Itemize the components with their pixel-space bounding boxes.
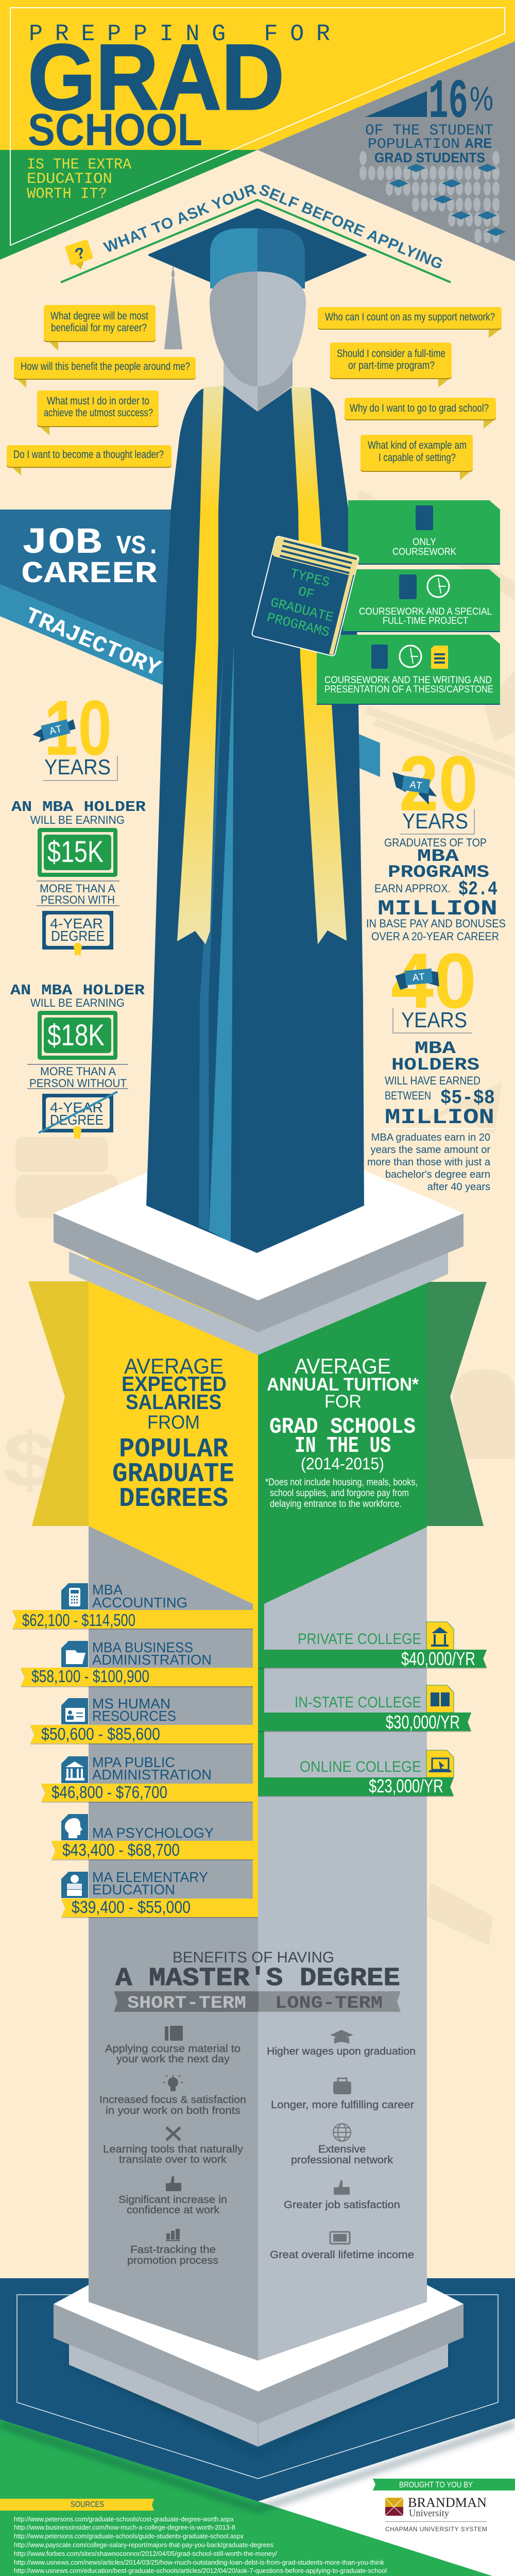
heading: benefits of having a master's degree: A MASTER'S DEGREE [115,1964,400,1993]
heading: annual tuition: (2014-2015) [301,1454,384,1473]
sources list: http://www.businessinsider.com/how-much-a-college-degree-is-worth-2013-8 [14,2523,235,2531]
gown fold: light blue [209,645,234,1242]
question bubble: benefit: How will this benefit the people around me? [21,361,190,372]
text: significant increase [118,2194,227,2216]
icon: dollar bill 18k [38,1011,117,1060]
question bubble: degree [44,305,156,351]
column: at 40 years: WILL HAVE EARNED [385,1074,480,1087]
column: at 10 years [10,684,146,1140]
sources list: http://www.forbes.com/sites/shawnoconnor/2012/04/05/grad-school-still-worth-the-money/ [14,2550,277,2557]
sources list: http://www.usnews.com/news/articles/2014/03/25/how-much-outstanding-loan-debt-is-from-grad-students-more-than-you-think [14,2558,384,2566]
logo: brandman university: University [409,2508,449,2519]
column: at 20 years: MILLION [377,896,497,921]
benefits: short-term column [99,2026,246,2266]
ribbon: short-term and long-term [114,1991,401,2013]
salary row: mba business administration: $58,100 - $100,900 [31,1667,149,1686]
salary row: mpa public administration: MPA PUBLIC [92,1754,175,1770]
pedestal: lower [54,2304,464,2455]
salary row: ma psychology [52,1814,253,1859]
corner rule [43,756,117,781]
text: mba graduates note: bachelor's degree earn [385,1169,490,1180]
ribbon: trajectory: TRAJECTORY [21,603,164,683]
heading: what to ask yourself: WHAT TO ASK YOURSELF BEFORE APPLYING [103,184,442,268]
question bubble: thought leader: Do I want to become a thought leader? [13,449,164,461]
label: years: YEARS [402,809,468,833]
icon: dollar bill 15k: $15K [47,835,104,869]
text: mba graduates note: MBA graduates earn in 20 [371,1132,490,1143]
statistic: 16 percent of students: 16 [428,71,468,134]
text: more than: MORE THAN A [40,882,115,895]
ribbon: brought to you by [373,2479,515,2490]
ribbon: trajectory [0,584,380,777]
panel: coursework and thesis: PRESENTATION OF A THESIS/CAPSTONE [324,684,493,695]
question bubble: support network [318,307,502,338]
question bubble: example [360,435,473,480]
heading: expected salaries: POPULAR [119,1434,228,1465]
icon grid: student population [359,151,506,243]
head [210,272,306,386]
tuition row: online college [258,1750,454,1797]
column: at 10 years: PERSON WITHOUT [29,1077,127,1090]
question bubble: full-time: or part-time program? [348,360,435,371]
salary row: mba business administration: ADMINISTRATION [92,1652,212,1668]
statistic: 16 percent of students: ARE [465,135,492,151]
rule [37,905,119,906]
text: higher wages: Higher wages upon graduation [267,2046,416,2057]
column: at 10 years: WILL BE EARNING [30,996,125,1009]
tuition row: in-state college [258,1685,471,1733]
salary row: mba business administration: MBA BUSINESS [92,1639,193,1655]
column: at 10 years: WILL BE EARNING [30,814,125,826]
salary row: mpa public administration: ADMINISTRATION [92,1767,212,1783]
heading: benefits of having a master's degree: BENEFITS OF HAVING [173,1949,334,1966]
faded background illustrations: $ [3,1416,57,1503]
text: greater job satisfaction: Greater job satisfaction [284,2199,400,2211]
text: fast-tracking [127,2244,218,2266]
text: mba graduates note: more than those with just a [367,1157,491,1168]
icon: dollar bill 18k: $18K [47,1019,105,1052]
salary row: mpa public administration: $46,800 - $76,700 [52,1783,167,1802]
tuition row: private college: $40,000/YR [401,1648,475,1669]
text: extensive network: professional network [291,2155,393,2166]
panel: coursework and thesis [317,635,500,705]
question bubble: benefit [14,357,196,388]
text: fast-tracking: promotion process [127,2255,218,2266]
book: types of graduate programs: GRADUATE [269,595,335,625]
neck [224,355,293,412]
text: significant increase: Significant increase in [118,2194,227,2206]
tuition row: private college [258,1622,487,1669]
corner rule [400,809,474,834]
text: graduates of top mba programs: GRADUATES OF TOP [384,836,487,849]
column: at 40 years [367,937,495,1193]
panel: coursework and special project [343,569,500,632]
heading: benefits of having a master's degree [115,1949,400,1993]
column: at 20 years: $2.4 [458,878,497,901]
banner: at [395,968,439,990]
text: learning tools [103,2144,243,2165]
book: types of graduate programs: TYPES [288,566,331,590]
panel: job vs career [0,510,171,653]
column: at 40 years: $5-$8 [440,1087,495,1109]
faded background illustrations [3,489,515,1946]
column: at 20 years: EARN APPROX. [374,882,451,895]
statistic: 16 percent of students: GRAD STUDENTS [374,150,485,165]
text: fast-tracking: Fast-tracking the [130,2244,216,2256]
sources list: http://www.usnews.com/education/best-graduate-schools/articles/2012/04/20/ask-7-questions-before-applying-to-graduate-school [14,2567,387,2574]
logo: brandman university: CHAPMAN UNIVERSITY SYSTEM [385,2526,487,2533]
graduate figure [146,209,366,1253]
question bubble: thought leader [7,445,171,476]
pedestal: upper [54,1124,464,1355]
gown fold: mid blue [199,648,224,1231]
text: mba holder: AN MBA HOLDER [11,799,146,816]
column: at 40 years: BETWEEN [385,1089,431,1102]
statistic: 16 percent of students: % [470,79,493,117]
ribbon: short-term and long-term: SHORT-TERM [127,1994,246,2013]
text: mba graduates note: years the same amount or [371,1144,490,1156]
panel: only coursework [348,500,500,565]
question bubble: success [37,391,159,435]
panel: green subtitle area [0,150,258,260]
salary row: mpa public administration [41,1754,253,1802]
icon: bar chart [166,2229,180,2241]
book: types of graduate programs: PROGRAMS [265,610,331,640]
rule [37,880,119,882]
title: GRAD [28,25,284,129]
sources list [14,2515,387,2574]
book: types of graduate programs [251,536,359,656]
banner: at [389,772,439,806]
panel: coursework and thesis: COURSEWORK AND THE WRITING AND [324,675,492,686]
icon: suitcase [333,2078,351,2094]
green chevron line [61,200,451,282]
label: years: YEARS [44,755,111,779]
title: PREPPING FOR [29,21,330,47]
text: lifetime income: Great overall lifetime income [270,2249,414,2261]
salary row: mba accounting [12,1582,253,1630]
salary row: ma elementary education [61,1869,258,1917]
question bubble: example: I capable of setting? [379,452,456,464]
text: significant increase: confidence at work [127,2205,220,2216]
panel: coursework and special project: COURSEWORK AND A SPECIAL [359,606,492,617]
number: 10: 10 [44,684,112,772]
statistic: 16 percent of students: POPULATION [368,137,460,152]
icon: thumbs up [334,2180,350,2195]
text: applying course material: Applying course material to [105,2043,241,2055]
tuition row: in-state college: IN-STATE COLLEGE [295,1694,421,1711]
icon: tools [166,2127,180,2140]
text: applying course material [105,2043,241,2065]
text: learning tools: Learning tools that naturally [103,2144,243,2155]
icon: light bulb [163,2075,183,2091]
panel: coursework and special project: FULL-TIME PROJECT [383,616,468,626]
heading: annual tuition: ANNUAL TUITION* [267,1375,419,1395]
column: at 40 years: MILLION [385,1105,494,1130]
sources list: http://www.petersons.com/graduate-schools/guide-students-graduate-school.aspx [14,2532,244,2540]
ribbon: short-term and long-term: LONG-TERM [275,1994,383,2013]
icon: 4-year degree [42,911,113,956]
icon: 4-year degree crossed out [39,1092,117,1140]
statistic: 16 percent of students: OF THE STUDENT [365,122,493,140]
icon: 4-year degree crossed out: 4-YEAR [50,1099,103,1115]
panel: tuition section green banner [258,1236,487,1796]
panel: job vs career: CAREER [21,557,158,591]
text: mba holders earned: MBA [415,1039,456,1059]
tuition row: online college: ONLINE COLLEGE [300,1758,421,1775]
heading: annual tuition: FOR [324,1392,362,1412]
icon: dollar bill 15k [38,828,117,877]
salary row: ms human resources: RESOURCES [92,1708,176,1724]
text: extensive network [291,2144,393,2166]
question bubble: why grad school [345,398,496,429]
rule [27,1088,128,1089]
banner: at: AT [409,779,423,793]
panel: job vs career: VS. [116,532,161,562]
salary row: ms human resources [30,1696,253,1743]
column: at 20 years [366,740,506,943]
salary row: ms human resources: $50,600 - $85,600 [41,1724,160,1743]
text: learning tools: translate over to work [119,2154,227,2165]
icon: question bubble [65,239,96,272]
heading: expected salaries: GRADUATE [112,1459,234,1489]
icon: 4-year degree: 4-YEAR [50,916,103,931]
column: at 20 years: OVER A 20-YEAR CAREER [371,930,499,943]
heading: expected salaries: FROM [147,1412,200,1433]
corner rule [393,1008,472,1033]
question bubble: degree: What degree will be most [50,310,148,322]
rule [27,1064,128,1065]
text: mba holder second: AN MBA HOLDER [10,982,145,999]
heading: annual tuition: *Does not include housing, meals, books, [265,1477,418,1488]
subtitle: IS THE EXTRA [27,156,131,174]
text: mba graduates note [367,1132,491,1193]
icon: graduation cap [330,2030,353,2044]
column: white capital [54,2285,464,2392]
salary row: ma psychology: MA PSYCHOLOGY [92,1825,214,1841]
sources list: http://www.petersons.com/graduate-schools/cost-graduate-degree-worth.aspx [14,2515,234,2523]
text: more than without: MORE THAN A [40,1065,116,1078]
column: at 20 years: MBA [417,847,459,867]
icon: 4-year degree crossed out: DEGREE [50,1112,104,1128]
panel: yellow title area [0,0,515,150]
heading: expected salaries: EXPECTED [122,1372,227,1396]
logo: brandman university: BRANDMAN [408,2495,487,2510]
question bubble: example: What kind of example am [368,439,467,451]
benefits: long-term column [267,2030,416,2261]
statistic: 16 percent of students [365,71,493,165]
panel: only coursework: ONLY [413,537,436,548]
panel: salaries section yellow banner [28,1236,258,1917]
banner: at [31,718,77,743]
icon: tassel [164,266,182,349]
text: extensive network: Extensive [318,2144,366,2155]
salary row: ms human resources: MS HUMAN [92,1696,170,1711]
tuition row: online college: $23,000/YR [369,1775,443,1797]
heading: annual tuition: GRAD SCHOOLS [269,1414,416,1440]
heading: annual tuition: IN THE US [295,1433,391,1459]
panel: only coursework: COURSEWORK [392,547,456,557]
salary row: ma psychology: $43,400 - $68,700 [62,1840,180,1859]
tuition row: in-state college: $30,000/YR [386,1711,460,1733]
question bubble: success: What must I do in order to [47,395,149,407]
text: increased focus: in your work on both fronts [106,2105,241,2116]
sources list: http://www.payscale.com/college-salary-report/majors-that-pay-you-back/graduate-degrees [14,2541,273,2549]
icon: globe [333,2124,351,2141]
logo: brandman university [385,2495,487,2533]
salary row: mba business administration [21,1639,253,1686]
salary row: ma elementary education: EDUCATION [92,1882,175,1897]
number: 20: 20 [399,740,478,827]
ribbon: sources: SOURCES [71,2500,104,2509]
subtitle: EDUCATION [27,171,112,188]
title: SCHOOL [28,104,202,155]
label: years: YEARS [401,1008,467,1032]
question bubble: success: achieve the utmost success? [44,407,153,419]
heading: expected salaries: AVERAGE [124,1354,224,1378]
text: longer career: Longer, more fulfilling career [271,2099,414,2111]
decorative white outline [10,8,505,245]
icon: book [165,2026,183,2041]
icon: 4-year degree: DEGREE [51,928,105,944]
salary row: ma elementary education: $39,400 - $55,000 [72,1897,191,1917]
tuition row: private college: PRIVATE COLLEGE [298,1631,421,1648]
text: mba graduates note: after 40 years [427,1181,490,1193]
gown [146,386,364,1253]
heading: expected salaries: SALARIES [126,1390,221,1414]
heading: expected salaries: DEGREES [119,1483,228,1514]
icon: thumbs up [166,2176,181,2191]
column: light side [258,1527,427,2361]
book: types of graduate programs: OF [297,584,316,603]
panel: grey statistic area [258,41,515,261]
icon: mortarboard [149,209,366,301]
ribbon: sources [0,2499,154,2511]
salary row: ma elementary education: MA ELEMENTARY [92,1869,208,1885]
heading: annual tuition: AVERAGE [295,1354,391,1378]
question bubble: full-time [330,343,452,387]
salary row: mba accounting: MBA [92,1582,123,1598]
icon: money [330,2232,350,2244]
text: increased focus [99,2094,246,2116]
text: applying course material: your work the next day [116,2054,230,2065]
heading: annual tuition [265,1354,419,1510]
icon: question bubble: ? [73,244,87,263]
heading: annual tuition: delaying entrance to the workforce. [270,1499,402,1510]
subtitle: WORTH IT? [27,185,107,203]
salary row: mba accounting: $62,100 - $114,500 [22,1611,135,1630]
number: 40: 40 [391,937,476,1025]
column: at 40 years: HOLDERS [391,1056,479,1075]
heading: annual tuition: school supplies, and forgone pay from [270,1488,409,1499]
salary row: mba accounting: ACCOUNTING [92,1595,187,1611]
banner: at: AT [412,972,425,985]
stole left [177,386,224,944]
ribbon: brought to you by: BROUGHT TO YOU BY [399,2481,473,2489]
stole right [291,387,347,944]
text: increased focus: Increased focus & satisfaction [99,2094,246,2106]
question bubble: full-time: Should I consider a full-time [337,348,445,360]
banner: at: AT [48,723,63,738]
panel: job vs career: JOB [21,523,102,564]
column: dark side [89,1526,258,2361]
lower panel: navy base [0,2278,515,2576]
question bubble: degree: beneficial for my career? [51,322,147,334]
column: at 10 years: PERSON WITH [41,893,115,906]
heading: expected salaries [112,1354,234,1514]
column: at 20 years: PROGRAMS [388,863,489,883]
subtitle [27,156,131,203]
